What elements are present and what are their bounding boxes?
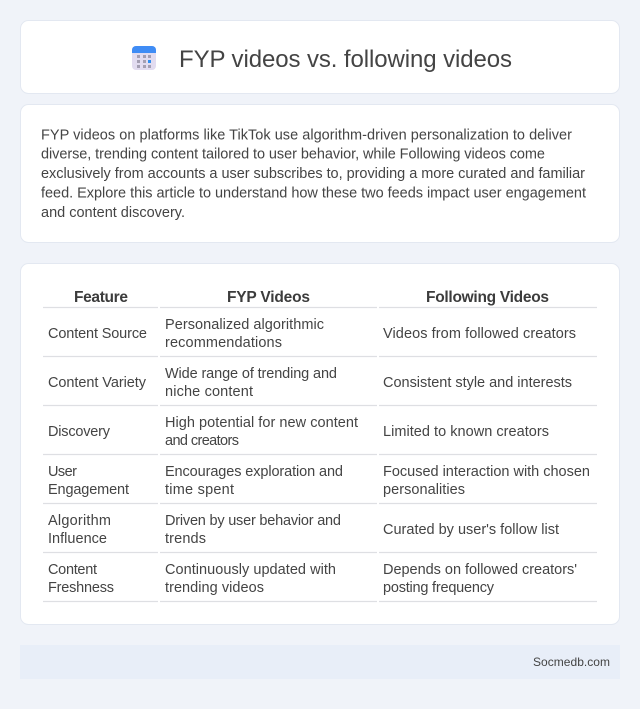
panel: title header — [20, 20, 620, 94]
table row: content freshness: Continuously updated with — [165, 562, 336, 578]
table row: content variety: Consistent style and interests — [383, 375, 572, 391]
panel: comparison table — [20, 264, 620, 624]
table row: discovery: Discovery — [48, 424, 111, 440]
table row: content source: Personalized algorithmic — [165, 317, 324, 333]
text block: introduction: exclusively from accounts a user subscribes to, providing a more curated and familiar — [41, 166, 585, 182]
table row: content variety — [48, 366, 572, 400]
table row: user engagement: Engagement — [48, 482, 129, 498]
table row: content freshness: Content — [48, 562, 97, 578]
text block: introduction: and content discovery. — [41, 205, 185, 221]
table row: content variety: Content Variety — [48, 375, 147, 391]
table row: algorithm influence: trends — [165, 531, 206, 547]
table row: content source — [48, 317, 576, 351]
table row: content freshness: Depends on followed creators' — [383, 562, 577, 578]
table row: user engagement: time spent — [165, 482, 234, 498]
footer credit: Socmedb.com — [533, 655, 610, 669]
table row: user engagement: User — [48, 464, 77, 480]
table row: discovery: High potential for new content — [165, 415, 358, 431]
table row: content source: Content Source — [48, 326, 147, 342]
text block: introduction — [41, 127, 586, 221]
table row: discovery: Limited to known creators — [383, 424, 549, 440]
icon: calendar — [132, 46, 156, 70]
table row: user engagement — [48, 464, 590, 498]
table row: discovery: and creators — [165, 433, 239, 449]
table row: user engagement: Encourages exploration and — [165, 464, 343, 480]
text block: introduction: FYP videos on platforms like TikTok use algorithm-driven personalization to deliver — [41, 127, 572, 143]
table row: algorithm influence: Influence — [48, 531, 107, 547]
table row: content freshness: Freshness — [48, 580, 114, 596]
table row: content freshness — [48, 562, 577, 596]
table row: content variety: Wide range of trending and — [165, 366, 337, 382]
table header row: FYP Videos — [227, 289, 310, 306]
table row: user engagement: Focused interaction with chosen — [383, 464, 590, 480]
text block: introduction: diverse, trending content tailored to user behavior, while Following videos come — [41, 147, 545, 163]
table header row: Feature — [74, 289, 128, 306]
table row: user engagement: personalities — [383, 482, 465, 498]
table row: algorithm influence: Algorithm — [48, 513, 111, 529]
table row: algorithm influence: Driven by user behavior and — [165, 513, 341, 529]
table row: content freshness: trending videos — [165, 580, 264, 596]
table header row: Following Videos — [426, 289, 549, 306]
footer bar — [20, 645, 620, 679]
text block: introduction: feed. Explore this article to understand how these two feeds impact user engagement — [41, 186, 586, 202]
title: FYP videos vs. following videos — [179, 46, 512, 73]
table row: algorithm influence: Curated by user's follow list — [383, 522, 559, 538]
panel: introduction — [20, 104, 620, 242]
table header row — [74, 289, 549, 306]
table row: content freshness: posting frequency — [383, 580, 495, 596]
table row: content source: Videos from followed creators — [383, 326, 576, 342]
table row: discovery — [48, 415, 549, 449]
table row: content variety: niche content — [165, 384, 253, 400]
table row: algorithm influence — [48, 513, 559, 547]
table row: content source: recommendations — [165, 335, 282, 351]
